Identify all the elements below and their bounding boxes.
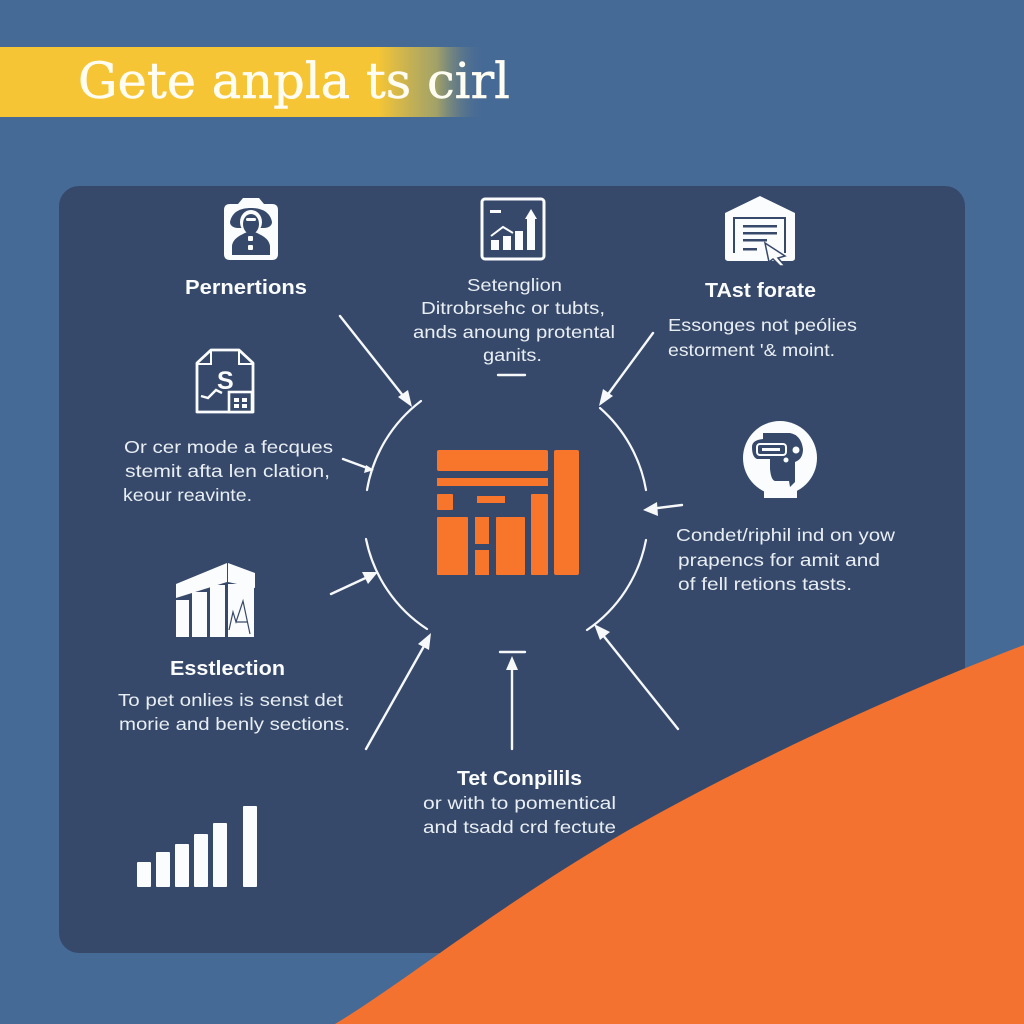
block: TAst forate: Essonges not peólies	[668, 315, 857, 335]
block: right text with head icon: Condet/riphil ind on yow	[676, 525, 895, 545]
title: Gete anpla ts cirl	[78, 52, 510, 110]
header band	[0, 47, 510, 117]
arrows pointing to centre	[331, 316, 682, 749]
block: Setenglion: ganits.	[483, 345, 542, 365]
block: right text with head icon: of fell retions tasts.	[678, 574, 852, 594]
icon: dollar document: S	[217, 367, 234, 395]
icon: building chart	[176, 563, 255, 637]
central circle arcs	[366, 401, 646, 630]
block: right text with head icon	[676, 421, 895, 594]
block: Pernertions: Pernertions	[185, 277, 307, 299]
block: left text with dollar document: Or cer mode a fecques	[124, 437, 333, 457]
icon: white bar chart	[137, 806, 257, 887]
main dark panel	[59, 186, 965, 953]
icon: dollar document	[197, 350, 253, 412]
block: Tet Conpilils: and tsadd crd fectute	[423, 817, 616, 837]
block: left text with dollar document: keour reavinte.	[123, 485, 252, 505]
block: TAst forate: estorment '& moint.	[668, 340, 835, 360]
block: Tet Conpilils	[423, 768, 616, 837]
central orange chart icon	[437, 450, 579, 575]
icon: person badge	[224, 198, 278, 260]
block: Tet Conpilils: Tet Conpilils	[457, 768, 582, 790]
block: right text with head icon: prapencs for amit and	[678, 550, 880, 570]
block: left text with dollar document: stemit afta len clation,	[125, 461, 330, 481]
block: Tet Conpilils: or with to pomentical	[423, 793, 616, 813]
block: Setenglion: Setenglion	[467, 275, 562, 295]
block: Esstlection: Esstlection	[170, 658, 285, 680]
block: left text with dollar document	[123, 350, 333, 505]
block: Setenglion: Ditrobrsehc or tubts,	[421, 298, 605, 318]
block: TAst forate	[668, 196, 857, 360]
icon: document with cursor	[725, 196, 795, 266]
block: TAst forate: TAst forate	[705, 280, 816, 302]
block: Pernertions	[185, 198, 307, 299]
block: Esstlection: To pet onlies is senst det	[118, 690, 343, 710]
icon: rising chart	[482, 199, 544, 259]
icon: head in circle	[743, 421, 817, 498]
block: Setenglion	[413, 199, 615, 365]
block: Esstlection	[118, 563, 350, 734]
block: Esstlection: morie and benly sections.	[119, 714, 350, 734]
orange corner shape	[335, 645, 1024, 1024]
block: Setenglion: ands anoung protental	[413, 322, 615, 342]
